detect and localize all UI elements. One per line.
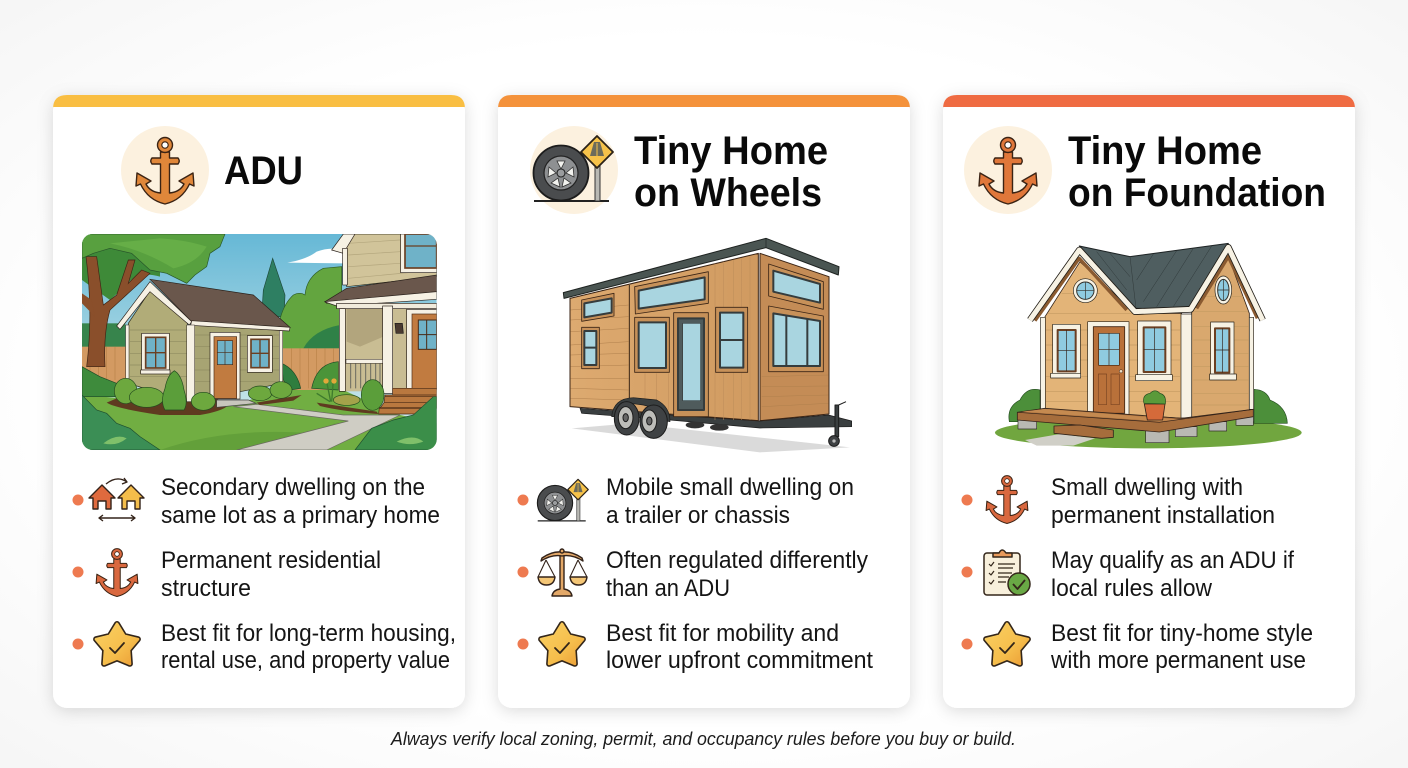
icon: balance scale [538,549,587,596]
bullet: regulated differently: Often regulated differently [606,547,868,574]
bullet: permanent structure: Permanent residential [161,547,381,574]
top accent band [943,95,1355,109]
bullet: regulated differently: than an ADU [606,575,730,602]
wheels and fender [612,398,670,422]
bullet: permanent structure: structure [161,575,251,602]
icon: star with check [541,624,583,664]
heading: Tiny Home on Wheels: Tiny Home [634,129,828,173]
heading: Tiny Home on Foundation: Tiny Home [1068,129,1262,173]
bullet: mobile dwelling: Mobile small dwelling on [606,474,854,501]
bullet: secondary dwelling: same lot as a primary home [161,502,440,529]
bullet: best fit: with more permanent use [1050,647,1306,674]
icon: clipboard with check [984,550,1030,595]
bullet: permanent installation: permanent installation [1051,502,1275,529]
bullet: mobile dwelling: a trailer or chassis [606,502,790,529]
icon: anchor in circle [964,126,1052,214]
trim [1035,257,1257,321]
walls [1045,262,1182,418]
icon: anchor in circle [121,126,209,214]
icon: tire and sign [537,479,588,521]
icon: star with check [96,624,138,664]
main house [347,234,437,287]
icon: star with check [986,624,1028,664]
panel: ADU [53,95,465,708]
icon: two houses with arrows [89,478,144,521]
bullet: secondary dwelling: Secondary dwelling on the [161,474,425,501]
bullet: permanent installation: Small dwelling with [1051,474,1243,501]
bullet: best fit: Best fit for mobility and [606,620,839,647]
icon: anchor [986,476,1028,523]
heading: ADU: ADU [224,149,303,193]
bullet: may qualify: local rules allow [1051,575,1213,602]
bullet: best fit [962,620,1313,674]
illustration: ADU backyard cottage [82,234,437,450]
heading: Tiny Home on Foundation [1068,129,1326,215]
bullet: permanent structure [72,547,381,602]
walls [570,253,758,421]
bullet: may qualify [962,547,1294,602]
heading: Tiny Home on Wheels: on Wheels [634,171,822,215]
illustration: tiny house on foundation [995,243,1302,448]
trailer frame [580,408,852,428]
panel: Tiny Home on Wheels [498,95,910,708]
hitch jack [835,402,846,437]
deck and piers [1018,417,1253,443]
top accent band [53,95,465,109]
bullet: best fit [518,620,873,674]
roof [563,238,839,298]
shrubs [114,371,292,410]
foreground foliage [82,395,160,450]
icon: tire and road sign in circle [530,126,618,214]
cottage walls [128,291,187,402]
panel: Tiny Home on Foundation [943,95,1355,708]
footer note: Always verify local zoning, permit, and occupancy rules before you buy or build. [390,729,1016,749]
mulch beds [107,398,227,415]
bullet: may qualify: May qualify as an ADU if [1051,547,1294,574]
heading: Tiny Home on Foundation: on Foundation [1068,171,1326,215]
icon: anchor [96,549,138,596]
bullet: secondary dwelling [72,474,440,529]
walkway [233,404,400,450]
illustration: tiny house on trailer [563,238,852,452]
bullet: permanent installation [962,474,1275,529]
bullet: best fit: Best fit for tiny-home style [1051,620,1313,647]
bullet: regulated differently [518,547,868,602]
door frame [1088,322,1129,414]
bullet: best fit: lower upfront commitment [606,647,873,674]
roof [1079,243,1228,308]
windows [582,264,823,417]
bullet: best fit [72,620,456,674]
potted plant [1144,404,1165,420]
heading: Tiny Home on Wheels [634,129,828,215]
top accent band [498,95,910,109]
bullet: best fit: Best fit for long-term housing, [161,620,456,647]
bullet: mobile dwelling [518,474,854,529]
bullet: best fit: rental use, and property value [161,647,450,674]
